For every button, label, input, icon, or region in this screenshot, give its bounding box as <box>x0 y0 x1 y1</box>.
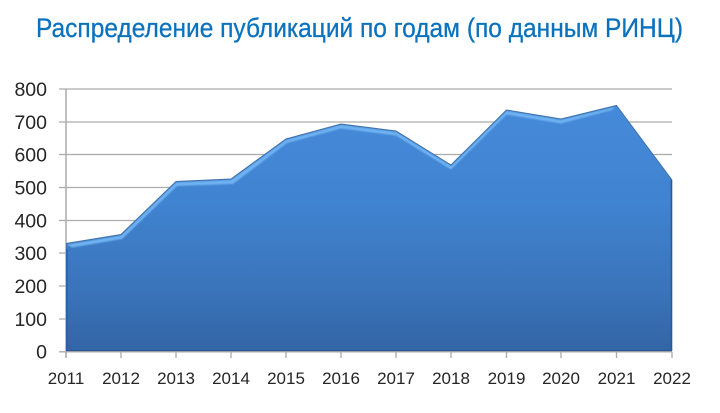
x axis labels: 2022 <box>653 369 691 388</box>
chart: area chart of publications by year <box>14 79 691 388</box>
x axis labels <box>48 369 691 388</box>
y axis labels <box>14 79 47 364</box>
x axis labels: 2020 <box>542 369 580 388</box>
y axis labels: 400 <box>14 210 47 232</box>
x axis labels: 2015 <box>267 369 305 388</box>
x axis labels: 2019 <box>488 369 525 388</box>
gridlines <box>59 89 672 319</box>
left edge shade <box>66 249 68 351</box>
top edge <box>66 106 672 244</box>
y axis line <box>65 89 67 358</box>
y axis labels: 300 <box>14 243 47 265</box>
bottom edge shade <box>66 350 672 352</box>
x axis labels: 2017 <box>377 369 415 388</box>
right edge shade <box>670 180 672 351</box>
y axis labels: 200 <box>14 276 47 298</box>
x axis line and ticks <box>59 352 672 358</box>
y axis labels: 0 <box>36 342 47 364</box>
x axis labels: 2014 <box>212 369 250 388</box>
bevel highlight <box>67 107 615 248</box>
x axis labels: 2016 <box>322 369 360 388</box>
y axis labels: 700 <box>14 112 47 134</box>
x axis labels: 2012 <box>102 369 140 388</box>
y axis labels: 600 <box>14 144 47 166</box>
y axis labels: 100 <box>14 309 47 331</box>
x axis labels: 2011 <box>48 369 84 388</box>
y axis labels: 500 <box>14 178 47 200</box>
x axis labels: 2018 <box>432 369 470 388</box>
x axis labels: 2013 <box>157 369 195 388</box>
x axis labels: 2021 <box>598 369 635 388</box>
area series <box>66 106 672 352</box>
y axis labels: 800 <box>14 79 47 101</box>
